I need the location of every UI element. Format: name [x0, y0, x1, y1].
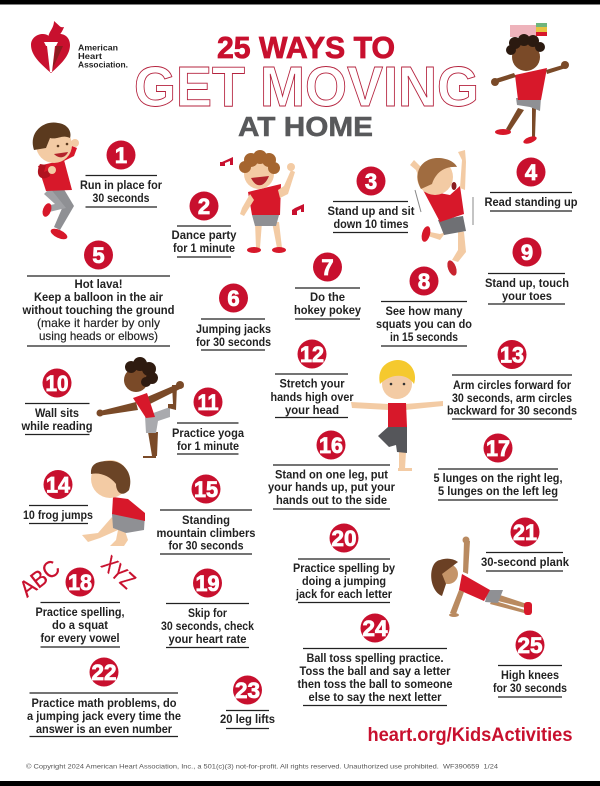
instruction 6: for 30 seconds [196, 335, 271, 349]
instruction 15 [156, 510, 256, 554]
instruction 3 [328, 202, 415, 232]
instruction 5: without touching the ground [22, 303, 175, 317]
step 10 [21, 368, 92, 434]
step 13 [447, 340, 577, 419]
instruction 1: Run in place for [80, 178, 162, 192]
instruction 5: using heads or elbows) [39, 329, 158, 343]
badge 17: 17 [486, 436, 510, 461]
instruction 10: Wall sits [35, 406, 79, 420]
instruction 1: 30 seconds [92, 191, 150, 205]
logo wordmark: American [78, 44, 118, 52]
instruction 12: your head [285, 403, 339, 417]
instruction 23: 20 leg lifts [220, 712, 275, 726]
instruction 19 [161, 604, 254, 648]
step 3 [328, 166, 415, 232]
instruction 24: else to say the next letter [308, 690, 442, 704]
badge 19: 19 [196, 571, 220, 596]
instruction 12 [270, 374, 354, 418]
illustration: blond child balancing on one leg [351, 360, 443, 471]
badge 3: 3 [365, 169, 377, 194]
instruction 1 [80, 176, 162, 207]
instruction 16: hands out to the side [276, 493, 387, 507]
instruction 22: Practice math problems, do [32, 696, 176, 710]
website link: heart.org/KidsActivities [368, 725, 572, 746]
instruction 9: Stand up, touch [485, 276, 569, 290]
badge 24: 24 [362, 616, 388, 641]
badge 16: 16 [319, 433, 343, 458]
instruction 6 [196, 319, 271, 350]
badge 25: 25 [518, 633, 542, 658]
letters decoration: ABC: ABC [14, 554, 65, 602]
step 16 [268, 430, 395, 509]
instruction 8: squats you can do [376, 317, 472, 331]
instruction 2 [172, 226, 237, 257]
instruction 4: Read standing up [484, 195, 578, 209]
badge 21: 21 [513, 520, 537, 545]
instruction 20: Practice spelling by [293, 561, 395, 575]
badge 8: 8 [418, 269, 430, 294]
instruction 8 [376, 302, 472, 346]
title line: at home: AT HOME [238, 111, 373, 142]
step 2 [172, 192, 237, 257]
step 14 [23, 470, 93, 524]
illustration: boy dancing [239, 150, 295, 253]
instruction 5 [22, 276, 175, 346]
instruction 18 [36, 602, 124, 647]
badge 4: 4 [525, 160, 538, 185]
instruction 3: down 10 times [334, 217, 409, 231]
instruction 5: Hot lava! [74, 277, 122, 291]
instruction 21: 30-second plank [481, 555, 569, 569]
letters decoration: XYZ: XYZ [97, 550, 141, 594]
copyright footer: © Copyright 2024 American Heart Association, Inc., a 501(c)(3) not-for-profit. All rights reserved. Unauthorized use prohibited. WF390659 1/24 [26, 762, 499, 770]
instruction 15: for 30 seconds [168, 538, 244, 552]
step 9 [485, 238, 569, 304]
step 23 [220, 676, 275, 728]
instruction 18: for every vowel [40, 631, 120, 645]
badge 22: 22 [92, 660, 116, 685]
badge 11: 11 [198, 390, 218, 415]
badge 7: 7 [321, 255, 334, 280]
icon: heart and torch [31, 21, 70, 73]
instruction 9 [485, 274, 569, 304]
instruction 17 [434, 469, 562, 500]
logo wordmark [78, 44, 128, 70]
illustration: girl doing side plank [431, 536, 532, 617]
instruction 13: backward for 30 seconds [447, 404, 577, 418]
badge 20: 20 [332, 526, 356, 551]
logo: American Heart Association [31, 21, 128, 73]
instruction 19: 30 seconds, check [161, 619, 254, 633]
illustration: boy balancing books [491, 23, 569, 145]
instruction 17: 5 lunges on the right leg, [434, 471, 562, 485]
step 21 [481, 518, 569, 571]
instruction 10: while reading [21, 419, 92, 433]
badge 10: 10 [46, 371, 68, 396]
step 8 [376, 266, 472, 346]
instruction 5: (make it harder by only [37, 316, 160, 330]
instruction 16: Stand on one leg, put [275, 468, 388, 482]
step 18 [36, 568, 124, 647]
badge 5: 5 [92, 243, 105, 268]
step 22 [27, 658, 181, 736]
icon: music notes [220, 157, 304, 215]
instruction 22: a jumping jack every time the [27, 709, 181, 723]
instruction 6: Jumping jacks [196, 322, 271, 336]
instruction 5: Keep a balloon in the air [34, 290, 163, 304]
step 6 [196, 284, 271, 350]
step 1 [80, 140, 162, 207]
instruction 11 [172, 423, 244, 454]
step 12 [270, 340, 354, 418]
illustration: child in yoga pose [96, 357, 184, 458]
instruction 13: 30 seconds, arm circles [452, 391, 572, 405]
instruction 25: High knees [501, 668, 559, 682]
step 24 [298, 614, 453, 706]
instruction 7: hokey pokey [294, 303, 361, 317]
title [134, 30, 479, 142]
instruction 7 [294, 288, 361, 319]
instruction 20: doing a jumping [302, 574, 386, 588]
badge 23: 23 [235, 678, 260, 703]
instruction 15: Standing [182, 513, 230, 527]
instruction 3: Stand up and sit [328, 204, 415, 218]
instruction 22 [27, 693, 181, 736]
badge 6: 6 [227, 286, 240, 311]
step 19 [161, 568, 254, 648]
instruction 2: for 1 minute [173, 241, 235, 255]
illustration: child doing frog jump [82, 460, 145, 546]
step 20 [293, 524, 395, 602]
step 7 [294, 252, 361, 319]
instruction 11: for 1 minute [177, 439, 239, 453]
instruction 16 [268, 465, 395, 509]
badge 12: 12 [300, 342, 324, 367]
badge 14: 14 [46, 472, 71, 497]
logo wordmark: Association. [78, 60, 128, 70]
instruction 24 [298, 648, 453, 706]
instruction 19: your heart rate [168, 632, 247, 646]
step 4 [484, 158, 578, 211]
instruction 8: in 15 seconds [390, 330, 458, 344]
step 5 [22, 240, 175, 346]
instruction 13: Arm circles forward for [453, 378, 571, 392]
instruction 2: Dance party [172, 228, 237, 242]
instruction 20: jack for each letter [295, 587, 392, 601]
instruction 18: do a squat [52, 618, 108, 632]
instruction 10 [21, 404, 92, 434]
badge 9: 9 [521, 240, 533, 265]
instruction 18: Practice spelling, [36, 605, 124, 619]
instruction 22: answer is an even number [36, 722, 172, 736]
instruction 8: See how many [386, 304, 463, 318]
instruction 16: your hands up, put your [268, 480, 395, 494]
illustration: boy jumping [410, 150, 473, 277]
illustration: boy running in place [33, 123, 79, 241]
badge 2: 2 [198, 194, 210, 219]
instruction 24: Ball toss spelling practice. [306, 651, 444, 665]
title line: get moving: GET MOVING [134, 55, 479, 119]
instruction 13 [447, 375, 577, 419]
step 11 [172, 388, 244, 454]
badge 5 [84, 240, 113, 270]
step 25 [493, 630, 567, 697]
instruction 24: Toss the ball and say a letter [300, 664, 451, 678]
step 15 [156, 474, 256, 554]
instruction 11: Practice yoga [172, 426, 244, 440]
instruction 9: your toes [502, 289, 552, 303]
instruction 25 [493, 666, 567, 697]
instruction 17: 5 lunges on the left leg [438, 484, 558, 498]
badge 15: 15 [194, 477, 218, 502]
badge 1: 1 [115, 143, 127, 168]
instruction 7: Do the [310, 290, 345, 304]
instruction 12: hands high over [270, 390, 354, 404]
instruction 20 [293, 559, 395, 602]
instruction 12: Stretch your [280, 376, 345, 390]
logo wordmark: Heart [78, 52, 102, 61]
step 17 [434, 434, 562, 500]
instruction 25: for 30 seconds [493, 681, 567, 695]
instruction 24: then toss the ball to someone [298, 677, 453, 691]
instruction 15: mountain climbers [156, 526, 256, 540]
instruction 19: Skip for [188, 606, 227, 620]
instruction 14: 10 frog jumps [23, 508, 93, 522]
badge 18: 18 [68, 570, 92, 595]
badge 13: 13 [500, 342, 524, 367]
title line: 25 ways to: 25 WAYS TO [217, 30, 395, 65]
